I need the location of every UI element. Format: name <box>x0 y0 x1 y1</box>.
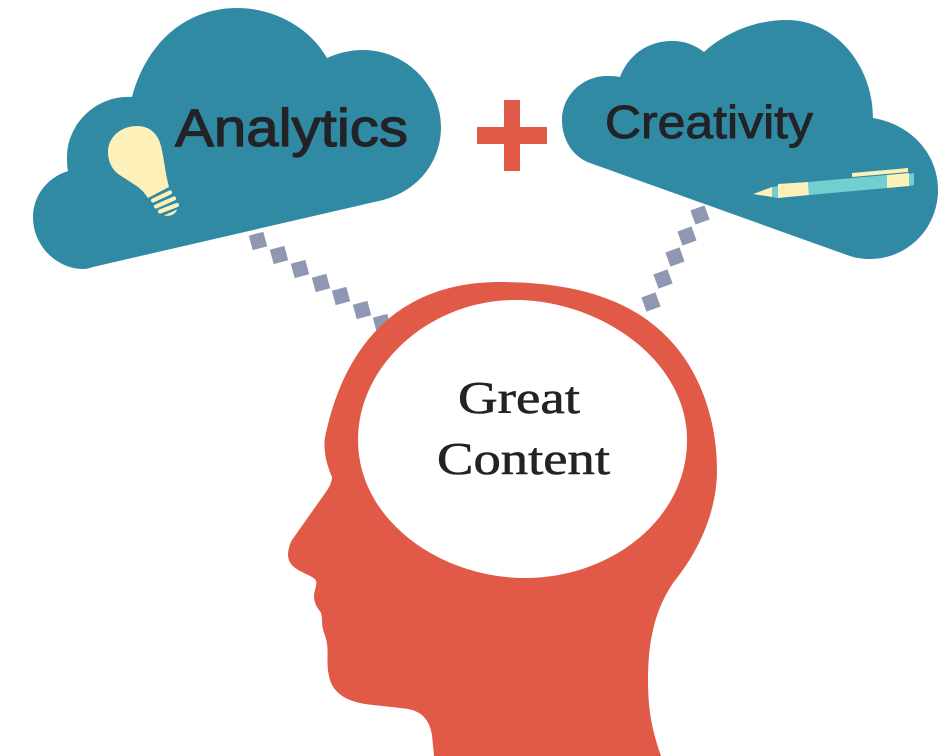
icon: pen <box>753 168 914 198</box>
brain cavity <box>358 300 687 578</box>
heading: Analytics: Analytics <box>175 99 408 158</box>
cloud shape: analytics <box>33 8 441 269</box>
head shape <box>288 282 717 756</box>
connector: creativity cloud to head <box>641 205 710 312</box>
connector: analytics cloud to head <box>249 232 391 332</box>
icon: plus sign <box>477 100 547 171</box>
panel: creativity cloud <box>562 20 938 259</box>
panel: head silhouette <box>288 282 717 756</box>
heading: Great Content <box>437 373 611 484</box>
icon: light bulb <box>108 126 177 216</box>
heading: Creativity: Creativity <box>605 96 813 148</box>
heading: Great Content: Great <box>458 373 581 423</box>
cloud shape: creativity <box>562 20 938 259</box>
panel: analytics cloud <box>33 8 441 269</box>
heading: Great Content: Content <box>437 434 611 484</box>
